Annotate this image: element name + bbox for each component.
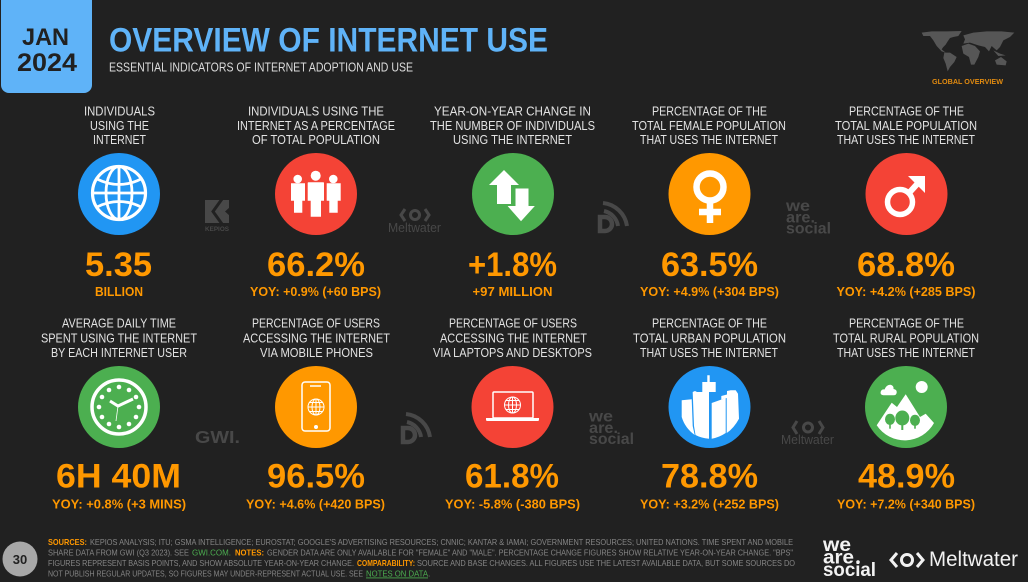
logo: we are social <box>822 535 876 581</box>
panel: urban population: YOY: +3.2% (+252 BPS) <box>640 498 779 512</box>
panel: individuals using the internet: USING THE <box>90 119 149 133</box>
watermark: signal icon row one <box>600 203 627 231</box>
panel: male population <box>835 104 977 299</box>
panel: female population <box>632 104 786 299</box>
panel: rural population: THAT USES THE INTERNET <box>837 346 975 360</box>
panel: male population: TOTAL MALE POPULATION <box>835 119 977 133</box>
watermark: Kepios <box>205 199 230 233</box>
footnotes: SOURCE AND BASE CHANGES. ALL FIGURES USE THE LATEST AVAILABLE DATA, BUT SOME SOURCES DO <box>417 558 795 568</box>
panel: percentage of total population <box>237 104 395 299</box>
panel: male population: YOY: +4.2% (+285 BPS) <box>836 285 976 299</box>
panel: laptops and desktops <box>433 316 592 512</box>
panel: individuals using the internet: INDIVIDUALS <box>84 104 155 118</box>
panel: year-on-year change: +1.8% <box>468 246 557 284</box>
panel: male population: 68.8% <box>857 246 955 284</box>
watermark: we are social row one: we <box>785 198 810 215</box>
world map: global overview: GLOBAL OVERVIEW <box>932 77 1003 86</box>
footnotes: SOURCES: <box>48 537 87 547</box>
panel: percentage of total population: OF TOTAL POPULATION <box>252 133 380 147</box>
date badge: JAN <box>22 24 69 51</box>
watermark: Meltwater row one: Meltwater <box>388 221 441 235</box>
panel: laptops and desktops: ACCESSING THE INTERNET <box>440 332 587 346</box>
panel: year-on-year change: THE NUMBER OF INDIVIDUALS <box>430 119 595 133</box>
panel: urban population: PERCENTAGE OF THE <box>652 316 767 330</box>
panel: year-on-year change: USING THE INTERNET <box>453 133 572 147</box>
panel: rural population: PERCENTAGE OF THE <box>849 316 964 330</box>
date badge <box>1 0 92 93</box>
panel: laptops and desktops: 61.8% <box>465 458 559 496</box>
title: OVERVIEW OF INTERNET USE <box>109 22 548 60</box>
panel: rural population: YOY: +7.2% (+340 BPS) <box>837 498 975 512</box>
panel: laptops and desktops: PERCENTAGE OF USERS <box>449 316 577 330</box>
footnotes: . <box>428 568 430 578</box>
panel: individuals using the internet: BILLION <box>95 285 143 299</box>
panel: year-on-year change: YEAR-ON-YEAR CHANGE IN <box>434 104 591 118</box>
panel: mobile phones <box>243 316 390 512</box>
panel: average daily time: AVERAGE DAILY TIME <box>62 316 176 330</box>
panel: percentage of total population: INDIVIDUALS USING THE <box>248 104 384 118</box>
panel: individuals using the internet: 5.35 <box>85 246 152 284</box>
world map: global overview <box>922 31 1014 86</box>
footnotes: FIGURES REPRESENT BASIS POINTS, AND SHOW ABSOLUTE YEAR-ON-YEAR CHANGE. <box>48 558 354 568</box>
panel: urban population: TOTAL URBAN POPULATION <box>633 332 786 346</box>
date badge: 2024 <box>17 49 77 77</box>
panel: average daily time: SPENT USING THE INTERNET <box>41 332 197 346</box>
panel: urban population <box>633 316 786 512</box>
watermark: we are social row one <box>785 198 831 238</box>
footnotes <box>48 537 795 578</box>
panel: average daily time: BY EACH INTERNET USER <box>51 346 187 360</box>
panel: rural population <box>833 316 979 512</box>
panel: individuals using the internet <box>78 104 160 299</box>
subtitle: ESSENTIAL INDICATORS OF INTERNET ADOPTION AND USE <box>109 60 413 74</box>
panel: female population: THAT USES THE INTERNET <box>640 133 778 147</box>
panel: rural population: TOTAL RURAL POPULATION <box>833 332 979 346</box>
watermark: we are social row one: social <box>786 220 831 238</box>
footnotes: NOTES: <box>235 548 264 558</box>
watermark: we are social row two <box>588 408 634 448</box>
footnotes: NOT PUBLISH REGULAR UPDATES, SO FIGURES MAY UNDER-REPRESENT ACTUAL USE. SEE <box>48 568 363 578</box>
panel: female population: TOTAL FEMALE POPULATION <box>632 119 786 133</box>
panel: mobile phones: ACCESSING THE INTERNET <box>243 332 390 346</box>
panel: urban population: THAT USES THE INTERNET <box>640 346 778 360</box>
panel: laptops and desktops: VIA LAPTOPS AND DESKTOPS <box>433 346 592 360</box>
panel: urban population: 78.8% <box>661 458 758 496</box>
footnotes: GENDER DATA ARE ONLY AVAILABLE FOR "FEMALE" AND "MALE". PERCENTAGE CHANGE FIGURES SHOW RELATIVE YEAR-ON-YEAR CHANGE. "BPS" <box>267 548 793 558</box>
logo: we are social: social <box>823 560 876 581</box>
panel: mobile phones: YOY: +4.6% (+420 BPS) <box>246 498 385 512</box>
watermark: Kepios: KEPIOS <box>205 226 230 233</box>
logo: we are social: we <box>822 535 851 556</box>
panel: mobile phones: PERCENTAGE OF USERS <box>252 316 380 330</box>
watermark: we are social row two: social <box>589 431 634 448</box>
panel: male population: THAT USES THE INTERNET <box>837 133 975 147</box>
page number <box>2 542 38 576</box>
footnotes: COMPARABILITY: <box>357 558 415 568</box>
panel: rural population: 48.9% <box>858 458 955 496</box>
watermark: Meltwater row two: Meltwater <box>781 433 834 447</box>
panel: average daily time <box>41 316 197 512</box>
panel: mobile phones: VIA MOBILE PHONES <box>260 346 373 360</box>
panel: female population: PERCENTAGE OF THE <box>652 104 767 118</box>
watermark: we are social row two: we <box>588 408 613 426</box>
logo: Meltwater: Meltwater <box>929 548 1018 571</box>
footnotes: KEPIOS ANALYSIS; ITU; GSMA INTELLIGENCE; EUROSTAT; GOOGLE'S ADVERTISING RESOURCES; CNNIC; KANTAR & IAMAI; GOVERNMENT RESOURCES; UNITED NATIONS. TIME SPENT AND MOBILE <box>90 537 793 547</box>
watermark: GWI: GWI. <box>195 427 240 447</box>
watermark: we are social row two: are. <box>589 420 618 437</box>
footnotes: GWI.COM. <box>192 548 231 558</box>
watermark: we are social row one: are. <box>786 210 815 226</box>
watermark: Meltwater row one <box>388 209 441 235</box>
panel: average daily time: 6H 40M <box>56 458 181 496</box>
panel: percentage of total population: INTERNET AS A PERCENTAGE <box>237 119 395 133</box>
panel: year-on-year change <box>430 104 595 299</box>
watermark: Meltwater row two <box>781 421 834 447</box>
panel: year-on-year change: +97 MILLION <box>472 285 552 299</box>
page number: 30 <box>13 552 27 567</box>
panel: percentage of total population: 66.2% <box>267 246 365 284</box>
panel: individuals using the internet: INTERNET <box>93 133 146 147</box>
panel: female population: 63.5% <box>661 246 758 284</box>
watermark: signal icon row two <box>403 414 430 442</box>
panel: laptops and desktops: YOY: -5.8% (-380 BPS) <box>445 498 580 512</box>
footnotes: SHARE DATA FROM GWI (Q3 2023). SEE <box>48 548 189 558</box>
logo: Meltwater <box>891 548 1018 571</box>
panel: male population: PERCENTAGE OF THE <box>849 104 964 118</box>
panel: female population: YOY: +4.9% (+304 BPS) <box>640 285 779 299</box>
panel: percentage of total population: YOY: +0.9% (+60 BPS) <box>250 285 381 299</box>
panel: average daily time: YOY: +0.8% (+3 MINS) <box>52 498 186 512</box>
logo: we are social: are <box>823 548 854 568</box>
panel: mobile phones: 96.5% <box>267 458 365 496</box>
footnotes: NOTES ON DATA <box>366 568 428 578</box>
